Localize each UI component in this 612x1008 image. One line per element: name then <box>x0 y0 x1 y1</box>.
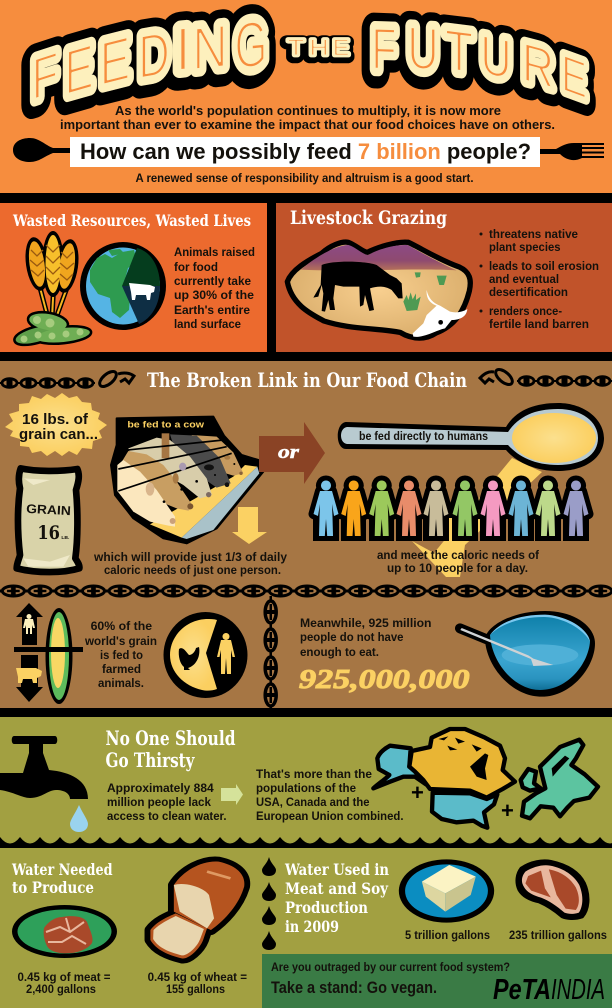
text: 884 million <box>107 781 226 823</box>
caption: cow: caloric needs of just one person. <box>104 563 281 577</box>
black band <box>0 193 612 361</box>
captions <box>405 928 607 942</box>
heading: No One Should <box>106 726 236 750</box>
icon: white cow <box>129 283 155 300</box>
arrow: down from trough <box>232 507 267 544</box>
text: 60 percent: is fed to <box>100 648 143 662</box>
title: U <box>480 23 512 91</box>
title: E <box>333 36 349 61</box>
intro text <box>60 104 555 132</box>
text: 884 million: Approximately 884 <box>107 781 214 795</box>
question: Are you outraged by our current food system? <box>271 960 510 974</box>
bullet list: fertile land barren <box>489 317 589 331</box>
badge: 16 lbs <box>5 393 107 456</box>
icon: bread <box>150 861 244 959</box>
text: 925 million: enough to eat. <box>300 645 379 659</box>
title: D <box>137 21 169 95</box>
heading <box>284 860 389 936</box>
text: 925 million: people do not have <box>300 630 404 644</box>
plus: one: + <box>411 780 424 805</box>
heading: Water Used in <box>284 860 389 879</box>
heading: to Produce <box>12 878 94 897</box>
bullet list: plant species <box>489 240 561 254</box>
panel: broken link <box>0 361 612 708</box>
title: N <box>192 12 228 83</box>
body text: currently take <box>174 274 251 288</box>
heading: Wasted Resources, Wasted Lives <box>12 211 251 230</box>
title: U <box>407 15 439 84</box>
title: N <box>192 12 228 83</box>
icon: person <box>217 633 235 674</box>
caption: meat <box>18 970 110 996</box>
black band: lower <box>0 708 612 717</box>
title: I <box>174 16 190 86</box>
bullet list <box>480 227 599 331</box>
icon: corn <box>14 608 83 704</box>
title: E <box>100 23 130 99</box>
title: R <box>522 31 554 100</box>
label: be fed to a cow <box>127 420 204 430</box>
icon: cow skull <box>413 290 467 337</box>
text: 60 percent: animals. <box>98 676 144 690</box>
title: F <box>31 42 57 116</box>
title: H <box>309 36 329 60</box>
title: E <box>65 31 93 109</box>
title: E <box>561 43 587 110</box>
arrow: light green <box>221 784 243 805</box>
title: T <box>288 36 304 60</box>
title: I <box>175 14 191 84</box>
icon: grain sack: 16 <box>37 522 60 544</box>
icon: up and down arrows <box>16 603 43 702</box>
title: E <box>100 23 130 99</box>
title: E <box>99 25 129 101</box>
chart: share of grain <box>164 612 248 698</box>
icon: grain sack: GRAIN <box>26 502 71 518</box>
title: E <box>332 38 348 63</box>
question banner: How can we possibly feed 7 billion people? <box>80 139 531 164</box>
caption: cow: which will provide just 1/3 of daily <box>93 550 287 564</box>
text: populations: populations of the <box>256 781 356 795</box>
title: F <box>372 15 396 82</box>
heading: Go Thirsty <box>106 748 196 772</box>
number: 925,000,000: 925,000,000 <box>299 664 470 694</box>
text: 60 percent: world's grain <box>84 634 157 648</box>
badge: 16 lbs: 16 lbs. of <box>22 411 89 428</box>
title: U <box>479 25 511 93</box>
panel: wasted resources <box>0 203 267 352</box>
slogan: Take a stand: Go vegan. <box>271 978 437 997</box>
body text <box>174 245 255 331</box>
title: E <box>64 33 92 111</box>
caption: meat: 0.45 kg of meat = <box>18 970 110 984</box>
icon: spoon of grain: be fed directly to humans <box>359 429 488 443</box>
icon: grain sack: LB. <box>61 535 70 541</box>
heading <box>11 860 113 897</box>
logo: PeTA <box>493 974 551 1006</box>
caption: people: up to 10 people for a day. <box>387 561 528 575</box>
icon: spoon of grain <box>338 403 604 471</box>
intro text: important than ever to examine the impact that our food choices have on others. <box>60 118 555 132</box>
title: I <box>175 14 191 84</box>
icon: tap <box>0 736 88 799</box>
icon: empty bowl <box>460 611 595 697</box>
chain: right <box>480 367 612 387</box>
bullet list: and eventual <box>489 272 559 286</box>
title: U <box>407 15 439 84</box>
title: R <box>521 33 553 102</box>
caption: people: and meet the caloric needs of <box>377 548 540 562</box>
icon: grass tufts <box>403 272 447 311</box>
heading: Production <box>285 898 368 917</box>
title: G <box>235 7 267 83</box>
wave border <box>0 837 612 848</box>
badge: 16 lbs: grain can... <box>19 426 98 443</box>
logo <box>493 974 605 1006</box>
intro text: As the world's population continues to multiply, it is now more <box>115 104 501 118</box>
title: T <box>288 36 304 60</box>
bullet list: threatens native <box>489 227 578 241</box>
caption: wheat: 155 gallons <box>166 982 225 996</box>
body text: for food <box>174 260 218 274</box>
icon: tofu on plate <box>399 859 494 923</box>
body text: land surface <box>174 317 241 331</box>
text: 925 million: Meanwhile, 925 million <box>300 616 432 630</box>
text: populations <box>256 767 404 823</box>
heading <box>106 726 236 772</box>
panel: meat and soy <box>284 859 607 942</box>
title: E <box>333 36 349 61</box>
title: T <box>445 18 473 86</box>
heading: The Broken Link in Our Food Chain <box>147 368 467 392</box>
panel: livestock grazing <box>276 203 612 352</box>
title: G <box>235 7 267 83</box>
icon: meat on plate <box>12 905 117 958</box>
icon: chicken <box>179 647 199 670</box>
caption: meat: 2,400 gallons <box>26 982 96 996</box>
icon: water drop <box>70 805 88 832</box>
text: populations: European Union combined. <box>256 809 404 823</box>
captions: 235 trillion gallons <box>509 928 607 942</box>
heading: Livestock Grazing <box>290 207 447 229</box>
title: F <box>32 40 58 114</box>
icon: fork <box>538 143 604 160</box>
chain: left <box>0 369 134 389</box>
title: U <box>406 17 438 86</box>
icon: globe <box>80 242 166 330</box>
title: N <box>191 14 227 85</box>
title: T <box>287 38 303 62</box>
panel: header <box>0 0 612 193</box>
title: T <box>444 20 472 88</box>
icon: wheat and beans <box>14 231 91 347</box>
title: U <box>480 23 512 91</box>
captions: 5 trillion gallons <box>405 928 490 942</box>
text: 60 percent: 60% of the <box>91 619 152 633</box>
icon: grain sack <box>17 468 79 572</box>
title <box>31 7 587 116</box>
icon: steak <box>517 861 588 918</box>
title: F <box>371 17 395 84</box>
title: D <box>138 19 170 93</box>
icon: spoon <box>13 138 72 162</box>
caption: wheat: 0.45 kg of wheat = <box>148 970 247 984</box>
chain: vertical divider <box>265 596 276 708</box>
title: G <box>234 9 266 85</box>
caption: cow <box>93 550 287 577</box>
title: E <box>561 43 587 110</box>
panel: call to action <box>262 954 612 1008</box>
text: populations: USA, Canada and the <box>256 795 370 809</box>
title: H <box>309 36 329 60</box>
body text: up 30% of the <box>174 288 254 302</box>
arrow: spoon to people <box>412 458 542 577</box>
text: 60 percent: farmed <box>102 662 141 676</box>
heading: Meat and Soy <box>285 879 389 898</box>
icon: water drops <box>262 857 276 950</box>
text: 60 percent <box>84 619 157 690</box>
caption: people <box>377 548 540 575</box>
heading: in 2009 <box>285 917 339 936</box>
plus: two: + <box>501 798 514 823</box>
text: 925 million <box>300 616 432 659</box>
title: F <box>372 15 396 82</box>
title: H <box>308 38 328 62</box>
chain: horizontal divider <box>0 584 612 598</box>
text: populations: That's more than the <box>256 767 372 781</box>
text: 884 million: access to clean water. <box>107 809 226 823</box>
body text: Animals raised <box>174 245 255 259</box>
arrow: or: or <box>278 442 300 463</box>
bullet list: renders once- <box>489 304 562 318</box>
illustration: cows at trough <box>111 417 263 543</box>
title: F <box>32 40 58 114</box>
text: 884 million: million people lack <box>107 795 211 809</box>
illustration: grazing landscape <box>287 242 470 338</box>
icon: maps <box>373 729 598 828</box>
caption: wheat <box>148 970 247 996</box>
arrow: or <box>259 422 325 484</box>
title: E <box>65 31 93 109</box>
body text: Earth's entire <box>174 303 250 317</box>
title: R <box>522 31 554 100</box>
title: D <box>138 19 170 93</box>
title: T <box>445 18 473 86</box>
tagline: A renewed sense of responsibility and altruism is a good start. <box>136 171 474 185</box>
title: E <box>560 45 586 112</box>
bullet list: desertification <box>489 285 568 299</box>
people row <box>313 480 589 541</box>
panel: water needed to produce <box>11 860 247 996</box>
heading: Water Needed <box>11 860 113 879</box>
panel: no one should go thirsty <box>0 717 612 1008</box>
bullet list: leads to soil erosion <box>489 259 599 273</box>
icon: black cow <box>313 262 403 312</box>
